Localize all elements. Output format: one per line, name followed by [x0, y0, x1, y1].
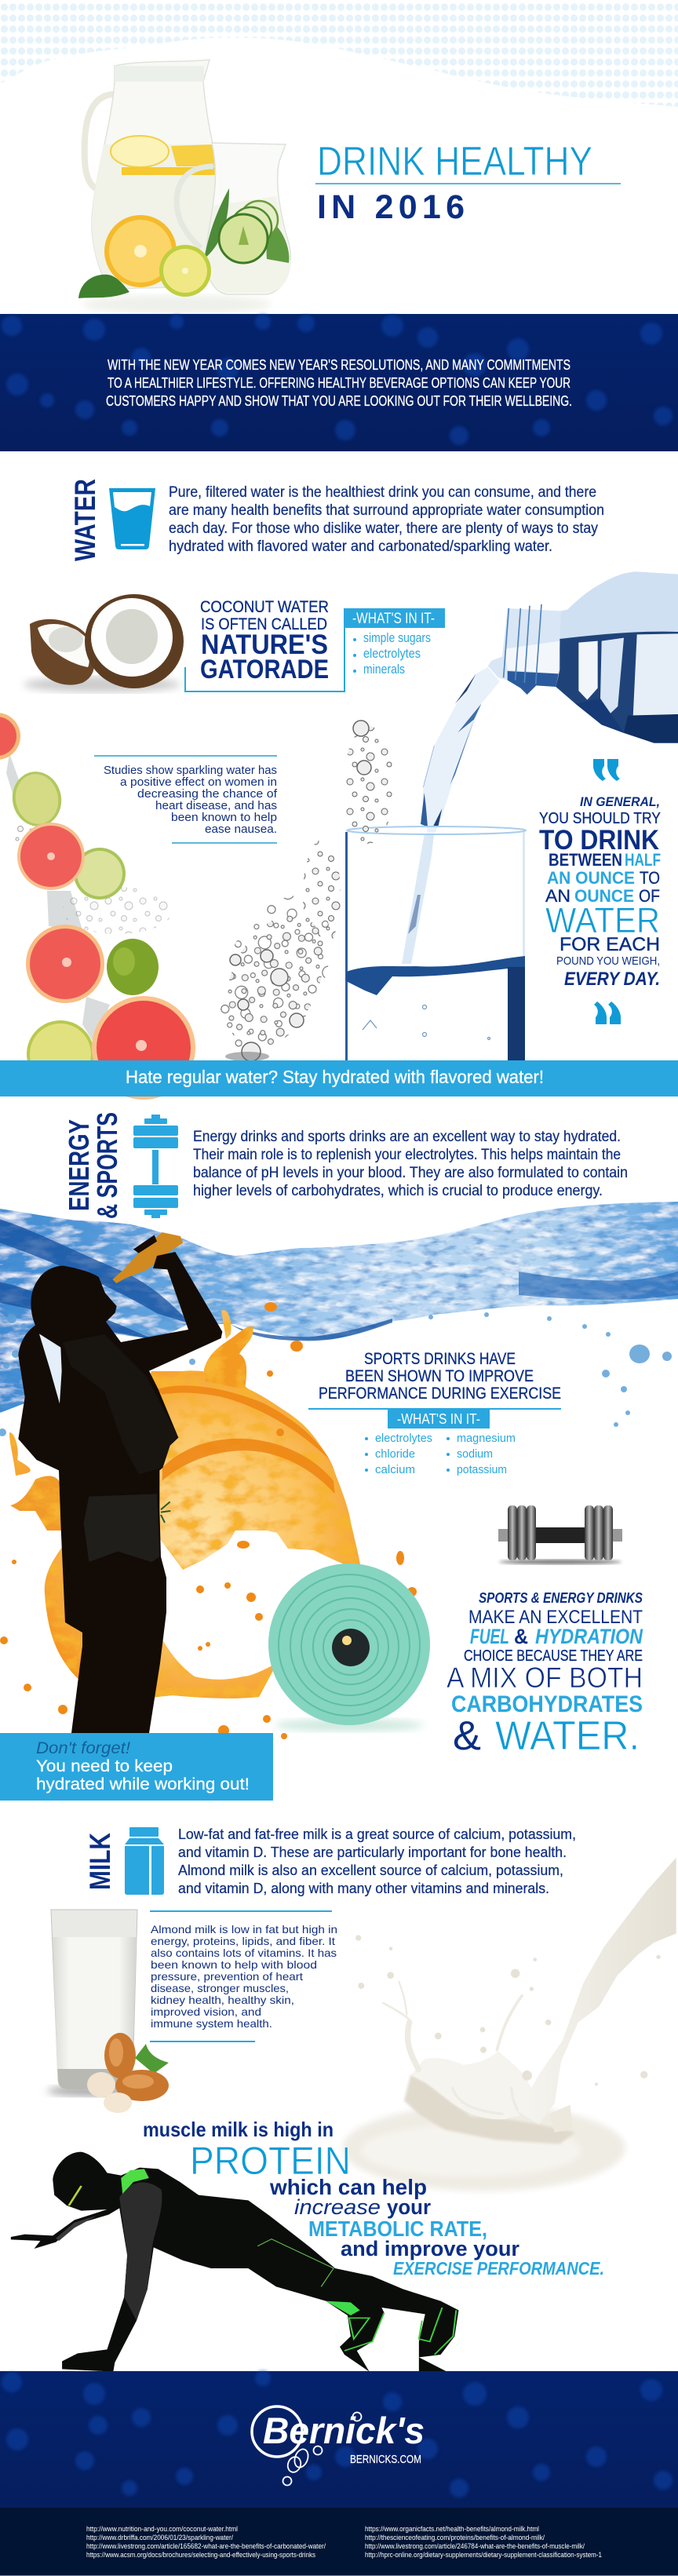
water pull quote: BETWEEN: [549, 850, 622, 870]
logo: Bernick's: Bernick's: [263, 2410, 425, 2451]
pitcher handle: [85, 94, 118, 188]
grapefruit: [17, 823, 85, 890]
right half: [85, 594, 184, 688]
logo: Bernick's: [252, 2406, 425, 2485]
source links, right column: http://www.livestrong.com/article/246784-what-are-the-benefits-of-muscle-milk/: [365, 2542, 585, 2551]
callout: don't forget: [0, 1733, 273, 1801]
callout: sports drinks: SPORTS DRINKS HAVE: [364, 1350, 516, 1368]
icon: glass of water: [109, 488, 155, 549]
grapefruit bottom: [92, 996, 195, 1100]
grapefruit top left: [0, 713, 20, 760]
water pull quote: OUNCE: [574, 886, 634, 906]
water pull quote: AN: [545, 886, 570, 906]
whole lime: [107, 939, 159, 995]
intro text: [106, 357, 572, 409]
icon: closing quote: [594, 1002, 621, 1024]
water intro paragraph: Pure, filtered water is the healthiest drink you can consume, and there: [169, 484, 596, 501]
almond milk text block: immune system health.: [151, 2017, 272, 2030]
callout: fuel and hydration: MAKE AN EXCELLENT: [468, 1607, 643, 1628]
source links, left column: [86, 2525, 326, 2560]
lime slice: [7, 767, 67, 831]
lemon slices in pitcher: [111, 136, 169, 167]
water pull quote: AN OUNCE: [547, 868, 635, 888]
photo: almonds: [87, 2033, 169, 2113]
photo: citrus fruit with splashes: [0, 713, 195, 1100]
sparkling water text block: [94, 755, 278, 844]
gap between hair and body: [39, 1334, 62, 1403]
water intro paragraph: [169, 484, 604, 555]
callout: coconut water: COCONUT WATER: [200, 598, 329, 616]
water intro paragraph: hydrated with flavored water and carbonated/sparkling water.: [169, 538, 552, 555]
photo: milk splash: [343, 1858, 676, 2191]
callout: fuel and hydration: &: [453, 1713, 481, 1759]
energy paragraph: [193, 1129, 628, 1199]
water pull quote: [539, 759, 661, 1024]
photo: dumbbell: [498, 1505, 622, 1564]
header dotted background: [0, 0, 678, 126]
neon accents: [121, 2169, 149, 2194]
source links, left column: http://www.drbriffa.com/2006/01/23/sparkling-water/: [86, 2534, 233, 2542]
callout: fuel and hydration: SPORTS & ENERGY DRINKS: [479, 1590, 643, 1606]
almond milk text block: been known to help with blood: [151, 1958, 317, 1971]
almond milk text block: also contains lots of vitamins. It has: [151, 1947, 337, 1959]
photo: orange drink splash: [0, 1302, 417, 1739]
callout: muscle milk: [143, 2118, 604, 2279]
title: IN 2016: [317, 188, 465, 226]
water pull quote: HALF: [625, 850, 661, 870]
milk paragraph: Almond milk is also an excellent source of calcium, potassium,: [178, 1863, 563, 1878]
illustration: pitcher and jug with lemon and cucumber: [78, 60, 290, 314]
source links, left column: https://www.acsm.org/docs/brochures/selecting-and-effectively-using-sports-drinks: [86, 2551, 315, 2560]
photo: water bottle pouring into glass: [345, 571, 678, 1060]
callout: muscle milk: and improve your: [341, 2237, 519, 2260]
panel: what's in coconut water: minerals: [363, 662, 405, 677]
energy and sports heading: ENERGY: [63, 1119, 95, 1211]
water section heading: WATER: [69, 479, 101, 561]
deep blue streaks: [0, 1219, 392, 1341]
water intro paragraph: each day. For those who dislike water, there are plenty of ways to stay: [169, 520, 598, 537]
callout: muscle milk: increase: [294, 2195, 381, 2219]
big lemon: [104, 215, 177, 287]
bottle: [488, 571, 678, 743]
sparkling water text block: decreasing the chance of: [137, 787, 278, 801]
water pull quote: TO DRINK: [539, 825, 659, 856]
callout: muscle milk: EXERCISE PERFORMANCE.: [393, 2258, 604, 2279]
icon: opening quote: [593, 759, 620, 781]
almond milk text block: energy, proteins, lipids, and fiber. It: [151, 1935, 335, 1947]
title: [315, 139, 621, 226]
milk droplets: [355, 1935, 661, 2085]
source links, left column: http://www.livestrong.com/article/165682-what-are-the-benefits-of-carbonated-water/: [86, 2542, 326, 2551]
panel: what's in coconut water: [344, 608, 445, 677]
lime half: [159, 245, 211, 297]
source links, right column: http://thescienceofeating.com/proteins/benefits-of-almond-milk/: [365, 2534, 545, 2542]
energy paragraph: higher levels of carbohydrates, which is crucial to produce energy.: [193, 1183, 603, 1199]
sparkling water text block: heart disease, and has: [155, 799, 277, 812]
sources footer: [0, 2508, 678, 2576]
water pull quote: YOU SHOULD TRY: [539, 810, 661, 827]
callout: coconut water: NATURE'S: [201, 629, 328, 660]
callout: sports drinks: [308, 1350, 561, 1410]
water pull quote: POUND YOU WEIGH,: [556, 954, 660, 968]
lemon leaf: [78, 275, 129, 298]
banner: flavored water: [0, 1060, 678, 1096]
darker band through splash: [157, 1385, 335, 1494]
pool: [343, 2105, 625, 2191]
energy paragraph: balance of pH levels in your blood. They are also formulated to contain: [193, 1165, 628, 1181]
callout: don't forget: hydrated while working out!: [36, 1775, 250, 1793]
panel: what's in sports drinks: calcium: [375, 1463, 415, 1476]
callout: don't forget: You need to keep: [36, 1757, 173, 1775]
cucumber slices: [240, 201, 278, 239]
panel: what's in sports drinks: sodium: [457, 1447, 493, 1461]
callout: coconut water: GATORADE: [200, 655, 329, 684]
callout: don't forget: Don't forget!: [36, 1739, 130, 1757]
pitcher glass: [92, 60, 224, 289]
panel: what's in sports drinks: magnesium: [457, 1432, 516, 1445]
water stream: [421, 667, 500, 851]
yoga mat: [268, 1563, 430, 1731]
splash: [6, 753, 110, 1044]
arm highlight: [119, 2183, 162, 2321]
callout: fuel and hydration: CARBOHYDRATES: [451, 1691, 643, 1717]
source links, right column: http://hprc-online.org/dietary-supplements/dietary-supplement-classification-system-1: [365, 2551, 602, 2560]
orange droplets: [0, 1302, 417, 1739]
small bubbles in glass: [363, 1005, 490, 1039]
left half: [30, 619, 94, 685]
photo: sparkling bubbles: [195, 721, 394, 1068]
silhouette: man doing push-up: [11, 2152, 458, 2372]
callout: coconut water: [185, 598, 344, 691]
callout: fuel and hydration: A MIX OF BOTH: [447, 1662, 643, 1694]
energy paragraph: Energy drinks and sports drinks are an excellent way to stay hydrated.: [193, 1129, 621, 1145]
panel: what's in sports drinks: electrolytes: [375, 1432, 432, 1445]
milk paragraph: and vitamin D, along with many other vitamins and minerals.: [178, 1881, 549, 1896]
footer band: [0, 2370, 678, 2508]
callout: muscle milk: muscle milk is high in: [143, 2118, 334, 2141]
water droplets: [0, 1312, 672, 1436]
bokeh lights: [2, 2370, 673, 2498]
callout: sports drinks: PERFORMANCE DURING EXERCISE: [319, 1385, 561, 1403]
panel: what's in coconut water: simple sugars: [363, 630, 431, 645]
bubbles: [282, 2413, 361, 2485]
milk heading: MILK: [84, 1833, 116, 1890]
water in pitcher: [92, 144, 222, 287]
crown inner: [410, 2051, 531, 2119]
small jug glass: [206, 143, 290, 294]
source links, left column: http://www.nutrition-and-you.com/coconut-water.html: [86, 2525, 238, 2534]
milk paragraph: Low-fat and fat-free milk is a great source of calcium, potassium,: [178, 1826, 576, 1842]
stream: [518, 1858, 676, 2125]
water pull quote: OF: [639, 886, 660, 906]
body: [11, 2152, 458, 2372]
shorts: [84, 1494, 159, 1562]
water pull quote: WATER: [545, 900, 660, 940]
photo: coconut halves: [24, 594, 184, 692]
callout: muscle milk: which can help: [269, 2175, 427, 2199]
source links, right column: https://www.organicfacts.net/health-benefits/almond-milk.html: [365, 2525, 539, 2534]
water intro paragraph: are many health benefits that surround appropriate water consumption: [169, 502, 604, 519]
side splash: [10, 1476, 61, 1531]
icon: dumbbell: [133, 1115, 178, 1218]
panel: what's in coconut water: electrolytes: [363, 646, 421, 661]
photo: water wave: [0, 1202, 678, 1436]
sparkling water text block: Studies show sparkling water has: [104, 764, 277, 777]
photo: milk glass: [47, 1910, 141, 2096]
hand strap: [133, 1235, 157, 1253]
almond milk text block: kidney health, healthy skin,: [151, 1994, 294, 2006]
icon: milk carton: [125, 1827, 164, 1895]
energy and sports heading: & SPORTS: [91, 1112, 123, 1219]
source links, right column: [365, 2525, 602, 2560]
small jug handle: [177, 166, 213, 248]
energy and sports heading: [63, 1112, 123, 1219]
callout: fuel and hydration: &: [514, 1625, 528, 1648]
panel: what's in sports drinks: [365, 1410, 516, 1476]
almond milk text block: Almond milk is low in fat but high in: [151, 1923, 337, 1936]
callout: sports drinks: BEEN SHOWN TO IMPROVE: [345, 1367, 534, 1385]
sparkling water text block: ease nausea.: [205, 823, 277, 836]
sparkling water text block: been known to help: [171, 811, 277, 824]
callout: fuel and hydration: HYDRATION: [535, 1625, 643, 1648]
upward splash: [204, 1326, 253, 1389]
callout: fuel and hydration: WATER.: [495, 1713, 640, 1759]
milk paragraph: and vitamin D. These are particularly important for bone health.: [178, 1844, 567, 1860]
lime slice bottom: [27, 1020, 94, 1088]
panel: what's in coconut water: -WHAT'S IN IT-: [352, 611, 435, 627]
splash arms: [383, 1982, 531, 2121]
panel: what's in sports drinks: -WHAT'S IN IT-: [397, 1411, 480, 1427]
callout: fuel and hydration: FUEL: [470, 1625, 509, 1648]
banner: flavored water: Hate regular water? Stay hydrated with flavored water!: [126, 1067, 544, 1087]
logo: Bernick's: BERNICKS.COM: [350, 2453, 421, 2466]
water pull quote: EVERY DAY.: [564, 969, 660, 990]
milk paragraph: [178, 1826, 576, 1896]
water pull quote: TO: [640, 868, 660, 888]
callout: coconut water: IS OFTEN CALLED: [201, 615, 327, 633]
bokeh lights: [2, 314, 673, 445]
sparkling water text block: a positive effect on women in: [120, 775, 277, 789]
callout: muscle milk: METABOLIC RATE,: [308, 2217, 487, 2241]
almond milk text block: pressure, prevention of heart: [151, 1970, 303, 1983]
towel: [63, 1334, 178, 1474]
callout: muscle milk: your: [387, 2195, 431, 2219]
drinking glass: [346, 832, 525, 1060]
body: [18, 1252, 222, 1733]
lime slice: [74, 848, 126, 899]
title: DRINK HEALTHY: [317, 139, 592, 184]
panel: what's in sports drinks: chloride: [375, 1447, 415, 1461]
almond milk text block: disease, stronger muscles,: [151, 1982, 289, 1994]
panel: what's in sports drinks: potassium: [457, 1463, 507, 1476]
water pull quote: FOR EACH: [560, 934, 660, 955]
intro band: [0, 314, 678, 451]
leaves in jug: [204, 188, 229, 259]
callout: muscle milk: PROTEIN: [190, 2139, 351, 2183]
almond milk text block: [150, 1910, 337, 2042]
almond milk text block: improved vision, and: [151, 2005, 261, 2018]
silhouette: woman drinking: [18, 1232, 222, 1733]
reflection: [82, 295, 271, 314]
callout: fuel and hydration: [447, 1590, 643, 1759]
crown outer shade: [404, 2074, 575, 2144]
water pull quote: IN GENERAL,: [580, 794, 660, 809]
energy paragraph: Their main role is to replenish your electrolytes. This helps maintain the: [193, 1147, 621, 1163]
sports bottle: [112, 1232, 183, 1283]
grapefruit middle: [26, 925, 104, 1003]
